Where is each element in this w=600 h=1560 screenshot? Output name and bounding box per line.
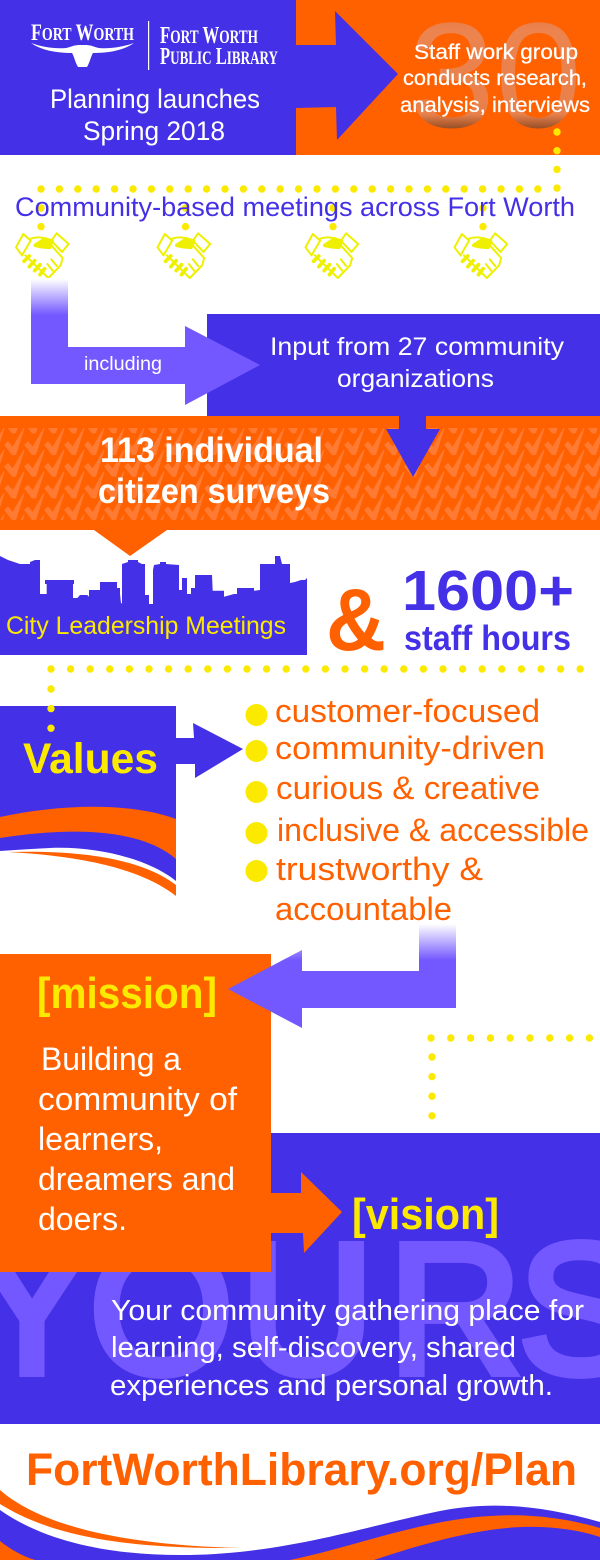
arrow: including	[31, 278, 260, 405]
text: vision statement: learning, self-discovery, shared	[111, 1332, 516, 1364]
list: values: curious & creative	[276, 770, 540, 806]
text: mission statement: community of	[38, 1081, 237, 1117]
heading: planning launches: Spring 2018	[83, 116, 225, 146]
footer swoosh: orange corner	[0, 1541, 35, 1560]
text: staff work group	[400, 41, 590, 117]
list: values: inclusive & accessible	[277, 812, 589, 848]
arrow: orange pointer	[94, 530, 167, 556]
panel: mission	[0, 954, 271, 1272]
text: mission statement: Building a	[41, 1041, 181, 1077]
text: individual citizen surveys	[98, 431, 330, 511]
text: individual citizen surveys: 113 individual	[100, 431, 323, 470]
text: staff work group: analysis, interviews	[400, 94, 590, 117]
icon: handshake 2	[157, 233, 210, 278]
arrow: values to list	[176, 723, 243, 778]
panel: community organizations	[207, 314, 600, 416]
footer swoosh: orange sliver	[0, 1490, 240, 1548]
heading: mission: [mission]	[37, 969, 217, 1018]
divider line in logo	[148, 21, 149, 70]
text: vision statement: Your community gathering place for	[111, 1295, 584, 1327]
panel: values	[0, 706, 176, 881]
text: input from organizations: Input from 27 community	[270, 333, 565, 361]
icon: handshake 3	[305, 233, 358, 278]
arrow: values to mission	[228, 924, 456, 1028]
icon: handshake 1	[16, 233, 69, 278]
swoosh: values orange band	[0, 807, 176, 859]
footer swoosh: blue wave	[0, 1506, 600, 1560]
ampersand: &	[326, 570, 386, 669]
text: staff work group: Staff work group	[414, 41, 578, 64]
heading: planning launches	[50, 84, 260, 146]
icon: handshake 4	[454, 233, 507, 278]
swoosh: values sliver	[8, 852, 176, 896]
logo: Fort Worth Public Library: FORT WORTH	[160, 23, 258, 49]
arrow: blue down	[386, 416, 440, 477]
link: plan URL: FortWorthLibrary.org/Plan	[26, 1444, 577, 1495]
label: including: including	[84, 354, 162, 375]
panel: vision	[0, 1133, 600, 1424]
arrow: blue right	[296, 11, 398, 140]
text: vision statement	[110, 1295, 584, 1402]
logo: Fort Worth Public Library	[160, 23, 278, 70]
stat: 1600+ staff hours	[402, 559, 574, 658]
panel: planning launch	[0, 0, 296, 155]
text: individual citizen surveys: citizen surveys	[98, 472, 330, 511]
heading: planning launches: Planning launches	[50, 84, 260, 114]
logo: Fort Worth Public Library: PUBLIC LIBRARY	[160, 44, 278, 70]
text: mission statement	[38, 1041, 237, 1237]
heading: vision: [vision]	[352, 1190, 499, 1239]
text: mission statement: doers.	[38, 1201, 127, 1237]
list: values	[246, 693, 589, 927]
list: values: community-driven	[275, 730, 545, 766]
text: mission statement: dreamers and	[38, 1161, 235, 1197]
panel: citizen surveys band	[0, 416, 600, 530]
text: input from organizations: organizations	[337, 365, 494, 393]
text: staff work group: conducts research,	[403, 67, 587, 90]
list: values: customer-focused	[275, 693, 540, 729]
dotted path: top	[41, 132, 557, 228]
footer swoosh: orange band	[290, 1515, 600, 1560]
logo: Fort Worth	[31, 20, 134, 67]
stat: 1600+ staff hours: staff hours	[404, 619, 571, 658]
text: city leadership meetings: City Leadership Meetings	[6, 612, 286, 640]
heading: values: Values	[23, 735, 158, 783]
arrow: mission to vision	[271, 1172, 342, 1253]
pattern: check marks	[0, 428, 600, 520]
logo: Fort Worth: FORT WORTH	[31, 20, 134, 45]
stat: 1600+ staff hours: 1600+	[402, 559, 574, 623]
panel: skyline	[0, 556, 307, 655]
text: mission statement: learners,	[38, 1121, 163, 1157]
heading: community meetings: Community-based meetings across Fort Worth	[15, 192, 575, 222]
dotted path: middle	[51, 669, 582, 730]
text: input from organizations	[270, 333, 565, 393]
text: vision statement: experiences and personal growth.	[110, 1370, 553, 1402]
dotted path: lower	[431, 1038, 592, 1118]
list: values: trustworthy &	[276, 851, 483, 887]
panel: staff work group	[296, 0, 600, 155]
list: values: accountable	[275, 891, 452, 927]
